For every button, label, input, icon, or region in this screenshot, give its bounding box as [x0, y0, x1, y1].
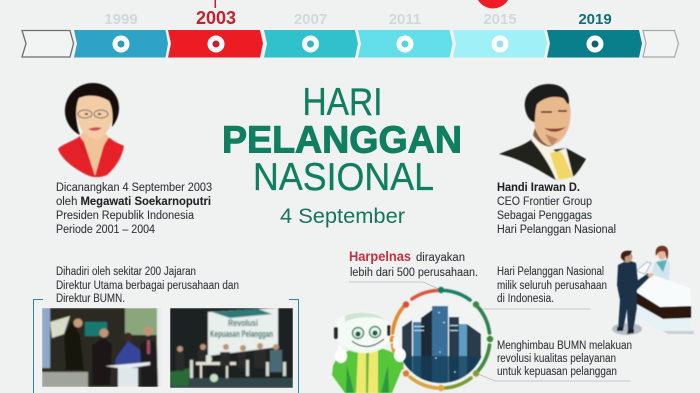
red marker stem	[214, 0, 216, 8]
segment 2019: 2019	[578, 11, 612, 28]
text block: national ownership	[497, 266, 607, 305]
title	[222, 81, 462, 228]
title: NASIONAL	[253, 156, 434, 199]
text block: Handi caption: Handi Irawan D.	[497, 182, 580, 194]
segment 2019	[547, 11, 642, 58]
timeline	[22, 0, 678, 58]
text block: BUMN appeal: untuk kepuasan pelanggan	[497, 366, 617, 378]
end outline arrow	[643, 30, 678, 57]
desk	[633, 270, 691, 307]
photo frame brackets	[34, 300, 298, 393]
text block: Megawati caption: oleh Megawati Soekarnoputri	[56, 196, 211, 208]
icon: portrait Megawati	[58, 83, 124, 177]
photo: panel discussion	[170, 308, 293, 388]
segment 2007: 2007	[294, 11, 327, 28]
text block: national ownership: milik seluruh perusahaan	[497, 280, 607, 292]
callout lines	[349, 282, 630, 381]
text block: BUMN appeal: revolusi kualitas pelayanan	[497, 353, 616, 365]
receptionist	[652, 258, 670, 282]
text block: Harpelnas: dirayakan	[416, 252, 465, 264]
text block: Harpelnas: Harpelnas	[349, 249, 411, 264]
segment 2007	[264, 11, 358, 58]
clipboard	[636, 262, 651, 274]
chart: ring with city	[389, 287, 493, 391]
ring segments	[392, 290, 490, 388]
text block: BUMN appeal	[497, 340, 632, 378]
title: 4 September	[280, 205, 405, 228]
start outline arrow	[22, 30, 74, 57]
title: HARI	[302, 81, 382, 124]
segment 2015	[453, 11, 547, 58]
segment 2003: 2003	[196, 8, 236, 28]
text block: Megawati caption	[56, 182, 212, 236]
red marker circle	[476, 0, 510, 8]
text block: Harpelnas	[349, 249, 478, 279]
text block: Harpelnas: lebih dari 500 perusahaan.	[350, 267, 478, 279]
shadow	[612, 323, 642, 335]
segment 1999	[74, 11, 168, 58]
photo: signing ceremony	[42, 308, 162, 387]
customer	[617, 260, 650, 331]
text block: Megawati caption: Presiden Republik Indonesia	[56, 210, 195, 222]
photo: panel discussion: Revolusi	[228, 318, 258, 328]
icon: portrait Handi	[499, 84, 586, 180]
skyline	[402, 306, 482, 384]
segment 2011	[358, 11, 452, 58]
ring nodes	[438, 287, 444, 293]
text block: attendance: Dihadiri oleh sekitar 200 Jajaran	[56, 266, 196, 278]
text block: national ownership: di Indonesia.	[497, 293, 554, 305]
title: PELANGGAN	[222, 120, 462, 162]
text block: attendance	[56, 266, 239, 305]
photo: panel discussion: Kepuasan Pelanggan	[210, 329, 273, 339]
text block: BUMN appeal: Menghimbau BUMN melakuan	[497, 340, 632, 352]
text block: Handi caption: Hari Pelanggan Nasional	[497, 224, 616, 236]
text block: Megawati caption: Periode 2001 – 2004	[56, 224, 156, 236]
text block: Handi caption: CEO Frontier Group	[497, 196, 592, 208]
icon: reception desk scene	[612, 246, 694, 335]
text block: Handi caption	[497, 182, 616, 236]
text block: national ownership: Hari Pelanggan Nasional	[497, 266, 604, 278]
text block: Megawati caption: Dicanangkan 4 September 2003	[56, 182, 212, 194]
segment 2015: 2015	[483, 11, 517, 28]
text block: Handi caption: Sebagai Penggagas	[497, 210, 592, 222]
text block: attendance: Direktur Utama berbagai perusahaan dan	[56, 280, 239, 292]
segment 1999: 1999	[104, 11, 138, 28]
text block: attendance: Direktur BUMN.	[56, 293, 125, 305]
segment 2003	[168, 8, 263, 58]
icon: mascot	[332, 312, 406, 393]
segment 2011: 2011	[389, 11, 421, 28]
